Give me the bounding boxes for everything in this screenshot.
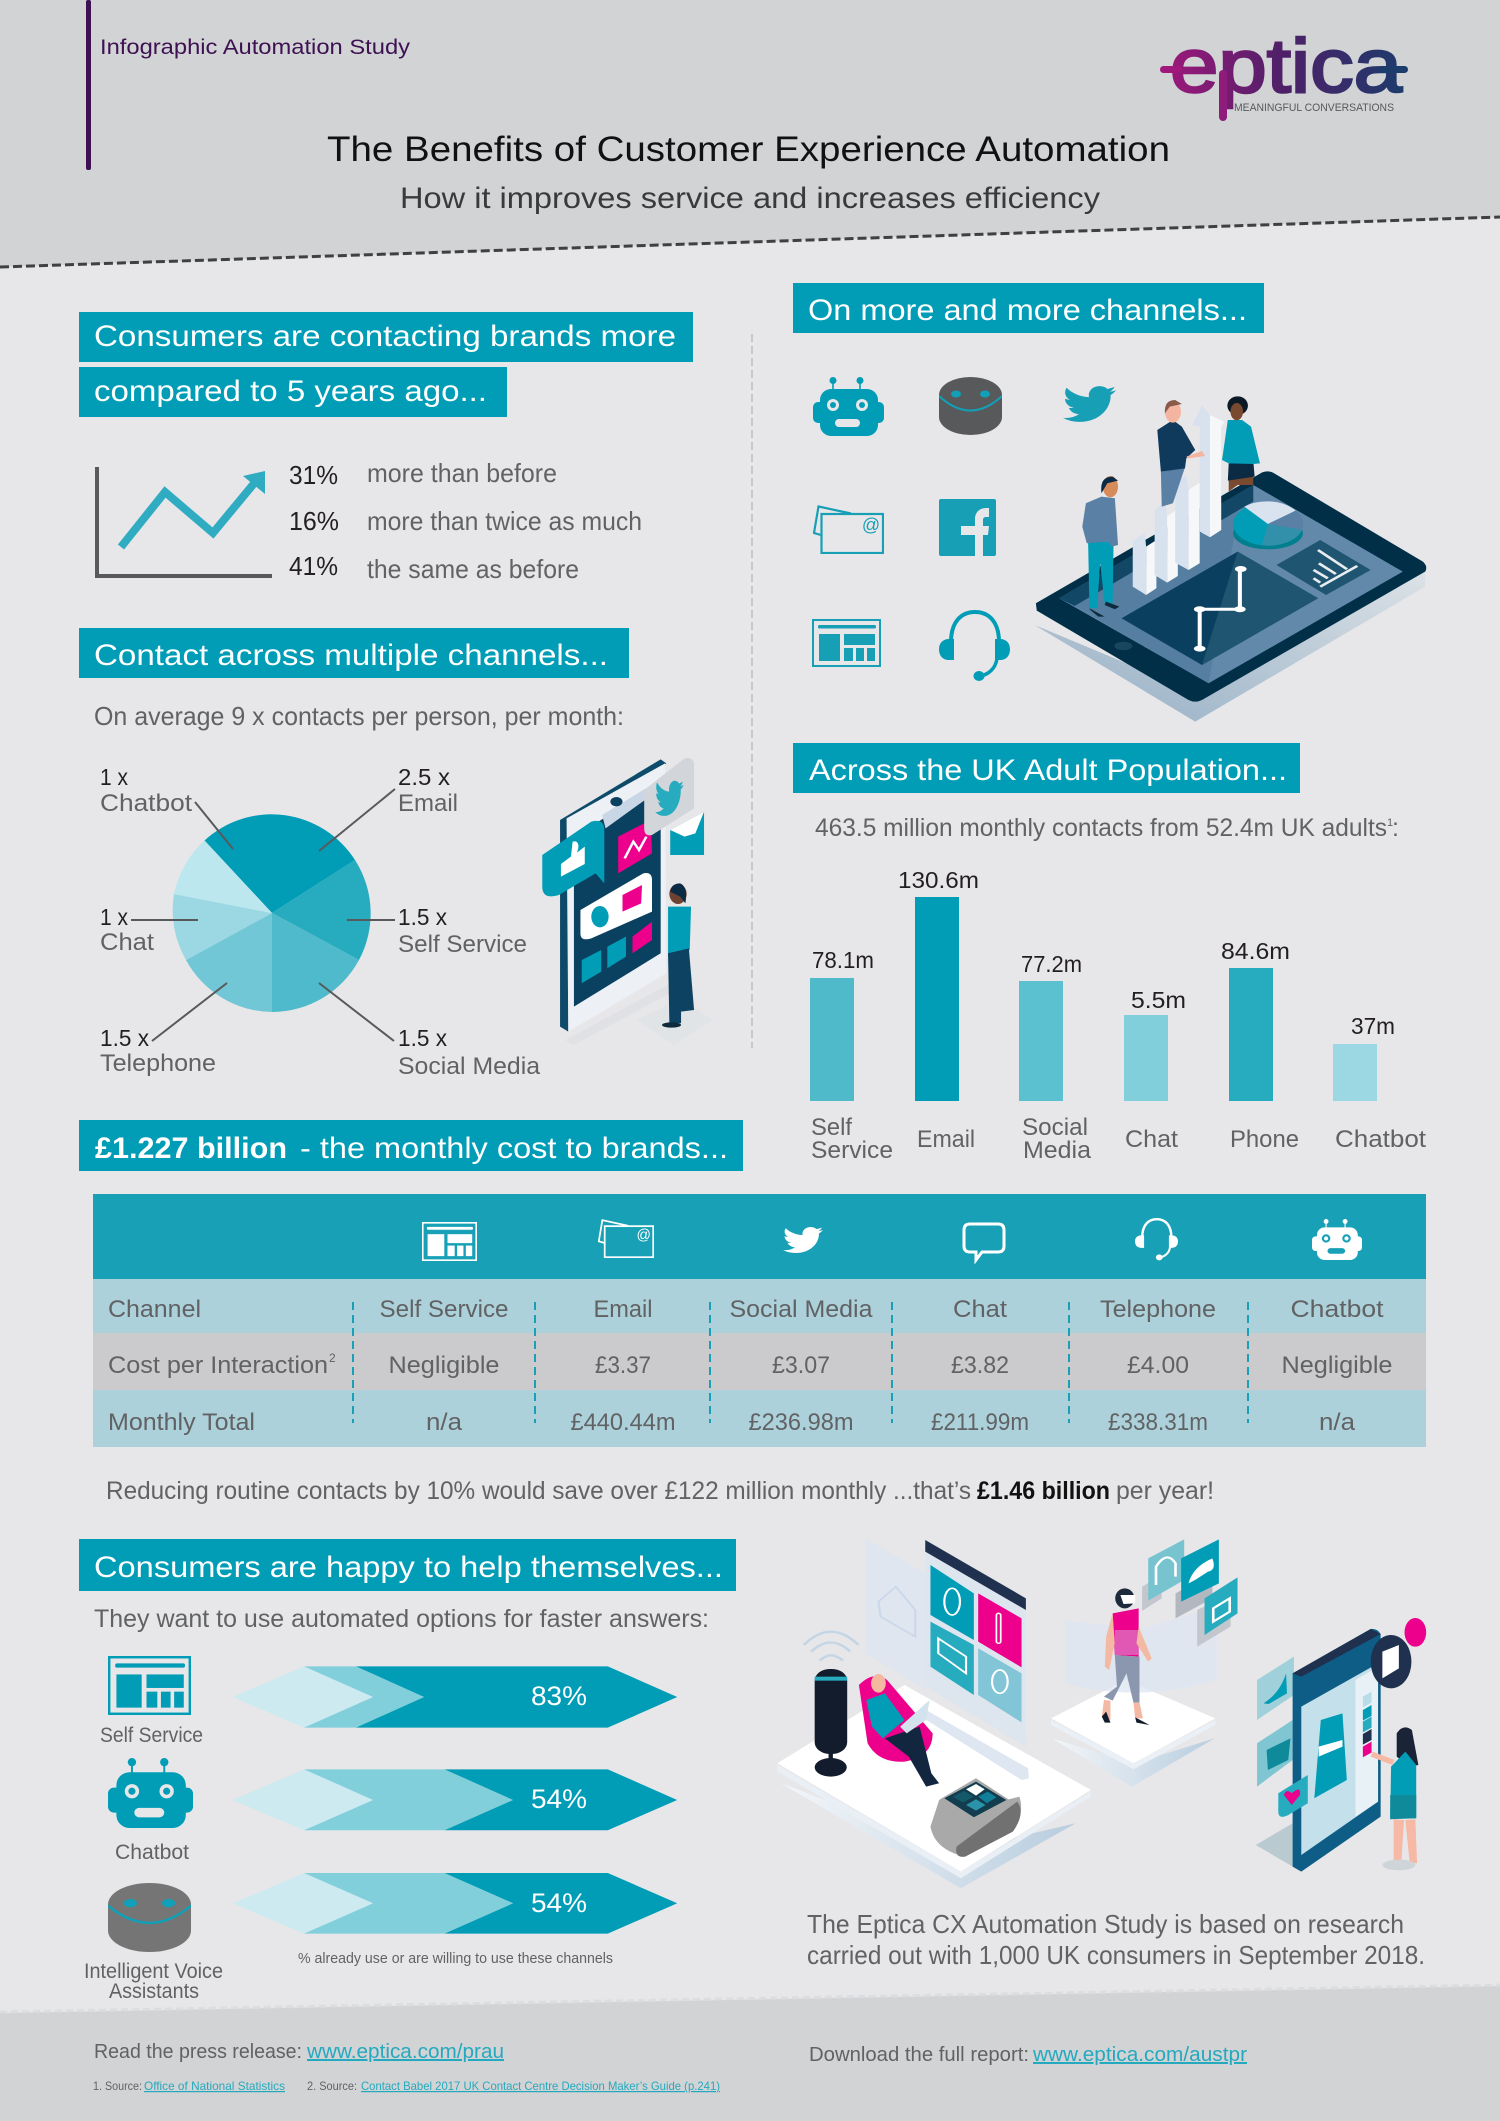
footer links (94, 2041, 1247, 2066)
stats list: 31% (289, 460, 338, 490)
arrow bars (233, 1666, 677, 1934)
table text: £4.00 (1127, 1352, 1189, 1379)
pie labels: 1.5 x (398, 1025, 447, 1051)
heading: more channels: On more and more channels... (808, 294, 1247, 327)
heading: monthly cost (79, 1120, 743, 1171)
heading: monthly cost: £1.227 billion (95, 1132, 287, 1165)
line chart icon (97, 467, 272, 576)
heading: UK population (793, 743, 1300, 793)
pie labels (100, 764, 541, 1080)
table text: Negligible (388, 1352, 500, 1379)
table text: Monthly Total (108, 1409, 255, 1436)
title: The Benefits of Customer Experience Automation (327, 130, 1170, 169)
pie labels: 1.5 x (398, 904, 447, 930)
panel: contacting brands more (79, 312, 693, 584)
table text: n/a (426, 1409, 463, 1436)
icon: headset (939, 612, 1010, 681)
footer links: www.eptica.com/prau (306, 2041, 504, 2063)
illustration: tablet with team (1035, 396, 1426, 722)
arrow bars: 83% (531, 1681, 587, 1711)
pie labels: 1 x (100, 764, 128, 790)
icon: twitter (1063, 386, 1116, 422)
chart note: % already use or are willing to use these channels (298, 1950, 613, 1967)
heading: help themselves (79, 1539, 736, 1591)
table text: Cost per Interaction (108, 1352, 328, 1379)
table text: Chatbot (1290, 1296, 1384, 1323)
bar chart: Chatbot (1335, 1126, 1426, 1153)
heading: help themselves: Consumers are happy to help themselves... (94, 1551, 723, 1584)
table text: Chat (953, 1296, 1007, 1323)
table text: £338.31m (1108, 1409, 1208, 1436)
footnotes: 1. Source: (93, 2079, 142, 2093)
pie chart (131, 789, 395, 1041)
table text: n/a (1319, 1409, 1356, 1436)
pie labels: Telephone (100, 1050, 216, 1077)
icon: voice assistant (108, 1883, 191, 1952)
panel: self help (79, 1539, 736, 2003)
column divider (751, 334, 753, 1048)
study label: Infographic Automation Study (100, 36, 411, 59)
stats list: 41% (289, 551, 338, 581)
table text: £3.82 (951, 1352, 1009, 1379)
intro text: 463.5 million monthly contacts from 52.4m UK adults (815, 814, 1387, 842)
pie labels: Social Media (398, 1053, 541, 1080)
panel: monthly cost (79, 1120, 1426, 1505)
table text: Negligible (1282, 1352, 1392, 1379)
intro text: : (1392, 814, 1399, 842)
stats list: the same as before (367, 554, 579, 584)
panel: UK adult population (793, 743, 1426, 1164)
bar chart: Email (917, 1126, 975, 1153)
pie labels: 1 x (100, 904, 128, 930)
label: voice assistants: Assistants (109, 1980, 199, 2003)
bar chart: Service (811, 1137, 893, 1164)
table text (108, 1296, 1392, 1436)
stats list: more than before (367, 458, 557, 488)
table text: Channel (108, 1296, 201, 1323)
bar chart: Chat (1125, 1126, 1178, 1153)
label: voice assistants: Intelligent Voice (84, 1960, 223, 1983)
footer links: www.eptica.com/austpr (1032, 2044, 1247, 2066)
bar chart: 37m (1351, 1013, 1395, 1039)
intro text: On average 9 x contacts per person, per month: (94, 701, 624, 731)
team (1088, 542, 1114, 608)
table text: £3.37 (595, 1352, 651, 1379)
footer band (0, 1985, 1500, 2121)
arrow bars: 54% (531, 1784, 587, 1814)
logo: eptica: MEANINGFUL CONVERSATIONS (1234, 102, 1394, 114)
table icons (423, 1219, 1362, 1260)
pie labels: 2.5 x (398, 764, 451, 790)
bar chart: 5.5m (1131, 987, 1186, 1013)
illustration: smart home, VR and shopping (777, 1538, 1426, 1888)
subtitle: How it improves service and increases efficiency (400, 182, 1100, 215)
table text: Social Media (730, 1296, 873, 1323)
icon: voice speaker (939, 377, 1002, 435)
footnotes (93, 2079, 720, 2093)
table text: 2 (329, 1351, 336, 1365)
icon: self service (109, 1657, 190, 1714)
intro text: They want to use automated options for faster answers: (94, 1605, 709, 1633)
study note: The Eptica CX Automation Study is based on research (807, 1909, 1404, 1939)
icon: facebook (939, 499, 996, 556)
stats list: more than twice as much (367, 506, 642, 536)
cost table (93, 1194, 1426, 1447)
table text: £236.98m (748, 1409, 854, 1436)
icon: robot (813, 377, 884, 436)
label: voice assistants (84, 1960, 223, 2003)
pie labels: Email (398, 790, 458, 817)
icon: web page (813, 620, 880, 666)
icon: email (814, 506, 883, 553)
footer links: Read the press release: (94, 2041, 302, 2063)
bar chart: Phone (1230, 1126, 1299, 1153)
study note (807, 1909, 1425, 1970)
savings statement: £1.46 billion (977, 1477, 1110, 1505)
bar chart: 77.2m (1021, 951, 1082, 977)
table text: Email (594, 1296, 652, 1323)
arrow bars: 54% (531, 1888, 587, 1918)
bar chart (810, 867, 1426, 1164)
table text: Telephone (1100, 1296, 1216, 1323)
heading: multiple channels: Contact across multiple channels... (94, 639, 608, 672)
heading: consumers contacting brands (79, 312, 693, 417)
bar chart: 130.6m (898, 867, 979, 893)
bar chart: Social (1022, 1114, 1088, 1141)
logo: eptica: eptica (1170, 24, 1403, 109)
footnotes: Office of National Statistics (144, 2079, 285, 2093)
table text: £3.07 (772, 1352, 830, 1379)
heading: consumers contacting brands: compared to 5 years ago... (94, 375, 487, 408)
label: chatbot: Chatbot (115, 1841, 189, 1864)
footnotes: Contact Babel 2017 UK Contact Centre Decision Maker’s Guide (p.241) (361, 2079, 720, 2093)
table text: Self Service (380, 1296, 508, 1323)
table text: £440.44m (570, 1409, 676, 1436)
header band (0, 0, 1500, 267)
bar chart: 78.1m (812, 947, 874, 973)
pie labels: Chat (100, 929, 154, 956)
heading: multiple channels (79, 628, 629, 678)
footer links: Download the full report: (809, 2044, 1029, 2066)
icon: chatbot (108, 1758, 193, 1828)
bar chart: Media (1023, 1137, 1092, 1164)
table text: £211.99m (931, 1409, 1029, 1436)
label: self service: Self Service (100, 1724, 203, 1747)
heading: consumers contacting brands: Consumers are contacting brands more (94, 320, 676, 353)
pie labels: 1.5 x (100, 1025, 149, 1051)
pie labels: Chatbot (100, 790, 192, 817)
bar chart: 84.6m (1221, 938, 1290, 964)
heading: more channels (793, 283, 1264, 333)
heading: UK population: Across the UK Adult Population... (809, 754, 1287, 787)
study note: carried out with 1,000 UK consumers in September 2018. (807, 1940, 1425, 1970)
panel: contact across channels (79, 628, 713, 1080)
savings statement: per year! (1116, 1477, 1214, 1505)
stats list: 16% (289, 506, 339, 536)
intro text: 1 (1387, 817, 1393, 829)
pie labels: Self Service (398, 931, 527, 958)
stats list (289, 458, 642, 584)
footnotes: 2. Source: (307, 2079, 357, 2093)
panel: more channels (793, 283, 1426, 722)
bar chart: Self (811, 1114, 852, 1141)
illustration: person with phone (542, 758, 713, 1045)
heading: monthly cost: - the monthly cost to brands... (300, 1132, 728, 1165)
savings statement: Reducing routine contacts by 10% would save over £122 million monthly ...that’s (106, 1477, 971, 1505)
